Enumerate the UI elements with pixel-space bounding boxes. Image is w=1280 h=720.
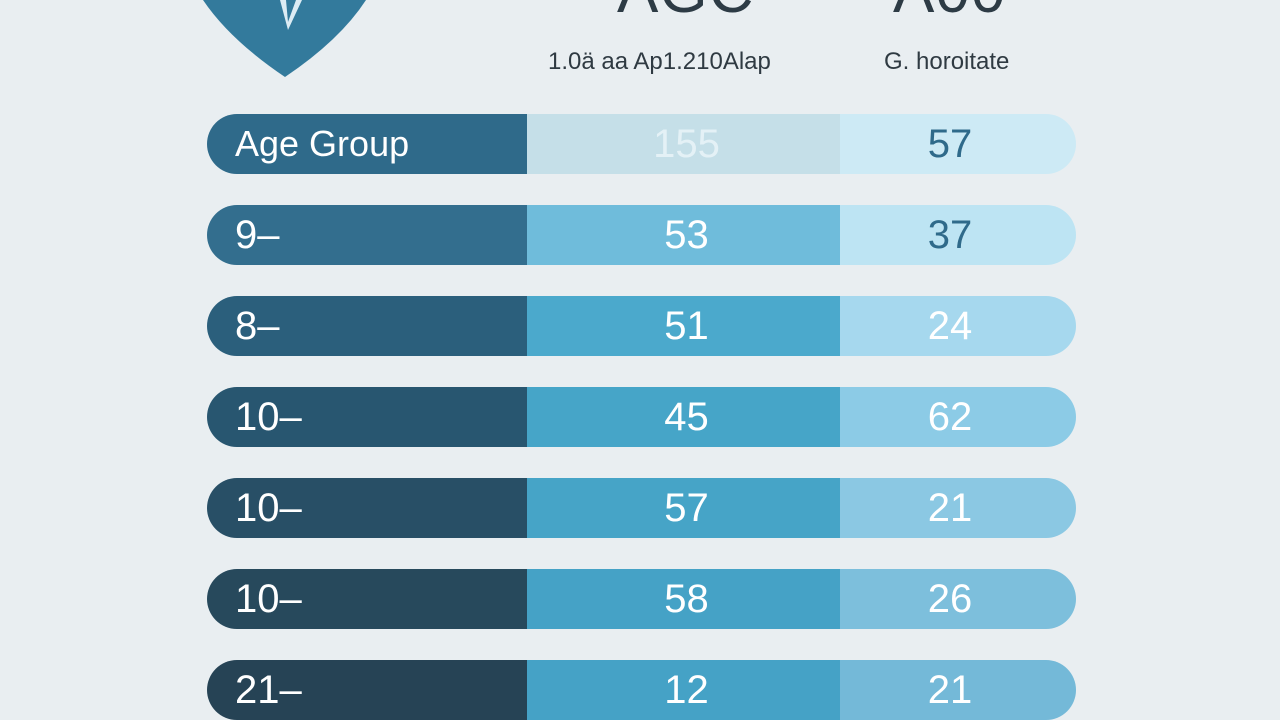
row: 8-: 51 bbox=[664, 304, 709, 348]
row: header bbox=[207, 114, 1076, 174]
row: 10- a: 62 bbox=[928, 394, 972, 438]
row: header: Age Group bbox=[235, 123, 409, 164]
row: 8-: 8– bbox=[235, 304, 280, 348]
row: 10- c: 10– bbox=[235, 576, 302, 620]
icon: heart shield bbox=[203, 0, 366, 77]
row: 21- bbox=[207, 660, 1076, 720]
row: header: 155 bbox=[653, 122, 720, 166]
row: 10- a: 10– bbox=[235, 394, 302, 438]
row: 10- a: 45 bbox=[664, 394, 709, 438]
row: header: 57 bbox=[928, 122, 972, 166]
row: 9-: 37 bbox=[928, 212, 972, 256]
row: 10- b: 10– bbox=[235, 486, 302, 530]
row: 10- c: 26 bbox=[928, 576, 972, 620]
row: 10- a bbox=[207, 387, 1076, 447]
row: 9-: 9– bbox=[235, 212, 280, 256]
row: 8- bbox=[207, 296, 1076, 356]
row: 10- c bbox=[207, 569, 1076, 629]
row: 10- b: 21 bbox=[928, 486, 972, 530]
subtitle left: 1.0ä aa Ap1.210Alap bbox=[548, 48, 771, 75]
row: 10- c: 58 bbox=[664, 576, 709, 620]
row: 10- b bbox=[207, 478, 1076, 538]
row: 9-: 53 bbox=[664, 212, 709, 256]
row: 21-: 21– bbox=[235, 668, 302, 712]
row: 10- b: 57 bbox=[664, 486, 709, 530]
row: 21-: 12 bbox=[664, 668, 709, 712]
row: 8-: 24 bbox=[928, 304, 972, 348]
row: 9- bbox=[207, 205, 1076, 265]
subtitle right: G. horoitate bbox=[884, 48, 1009, 75]
row: 21-: 21 bbox=[928, 668, 972, 712]
